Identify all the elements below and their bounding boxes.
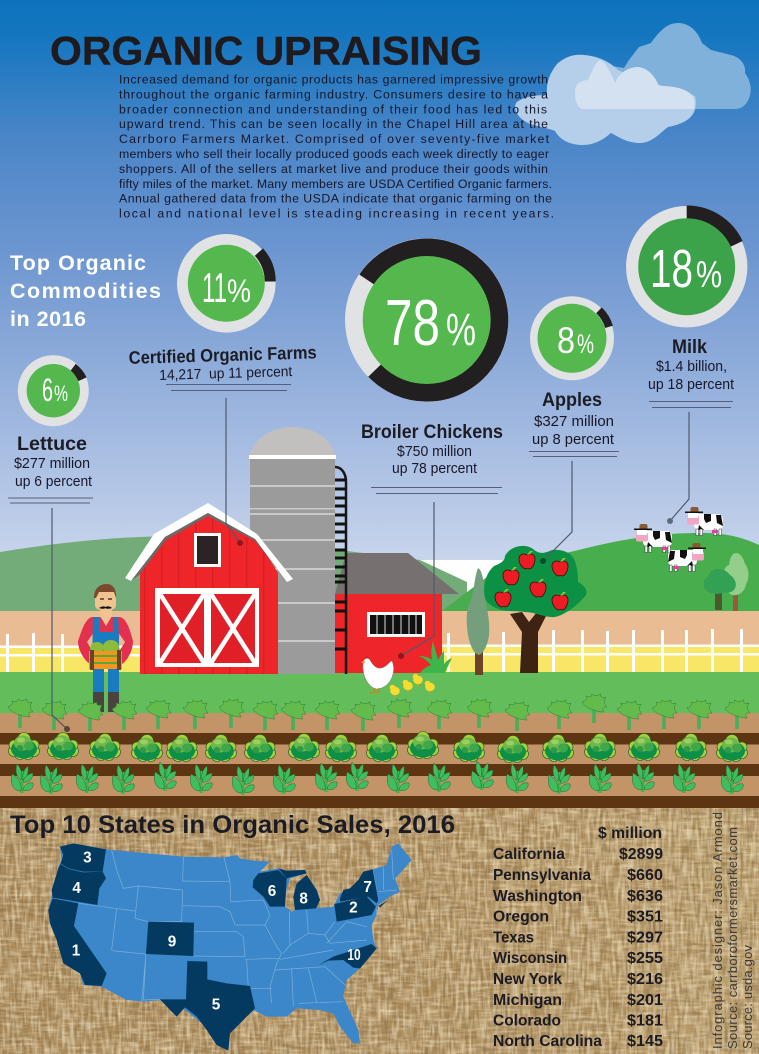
pointer: apples	[540, 461, 572, 564]
silo dome	[250, 427, 335, 455]
front cloud	[515, 55, 696, 145]
sales table: Oregon	[493, 908, 549, 926]
label: lettuce: Lettuce	[17, 433, 87, 455]
crop row: seedlings	[11, 761, 743, 795]
burlap background	[0, 808, 759, 1054]
California	[48, 898, 107, 986]
donut: certified organic farms 11%: 11	[202, 264, 227, 311]
sales table: $351	[627, 908, 663, 926]
sales table: Michigan	[493, 992, 562, 1009]
crop row: lettuce	[8, 732, 748, 762]
shirt and arms	[78, 617, 133, 664]
intro paragraph: Carrboro Farmers Market. Comprised of over seventy-five market	[119, 132, 550, 146]
sales table: $216	[627, 971, 663, 988]
credits: Source: usda.gov	[740, 944, 755, 1049]
map rank numbers: 2	[349, 900, 358, 917]
canopy	[484, 546, 587, 617]
moustache	[99, 606, 112, 609]
cow 3	[668, 543, 706, 572]
commodities heading: Commodities	[10, 279, 161, 303]
sales table: Texas	[493, 930, 534, 946]
label: lettuce: up 6 percent	[15, 474, 92, 490]
donut: lettuce 6%: 6	[42, 372, 53, 408]
legs	[93, 665, 119, 692]
label: lettuce: $277 million	[14, 456, 90, 472]
donut: broiler chickens 78%: %	[446, 304, 476, 355]
cypress tree	[467, 568, 489, 675]
silo	[249, 427, 336, 674]
peach field	[0, 611, 759, 673]
intro paragraph: broader connection and understanding of their food has led to this	[119, 102, 547, 116]
commodities heading: in 2016	[10, 307, 86, 331]
map rank numbers: 4	[72, 880, 81, 897]
map rank numbers: 9	[168, 933, 176, 950]
donut: milk 18%: %	[696, 254, 722, 296]
label: broiler chickens: up 78 percent	[392, 461, 477, 477]
table header: $ million	[598, 825, 662, 842]
label: broiler chickens: Broiler Chickens	[361, 422, 503, 443]
credits: Source: carrboroformersmarket.com	[725, 827, 740, 1049]
cloud overlap	[575, 60, 695, 109]
barn door	[155, 588, 259, 667]
sales table: North Carolina	[493, 1033, 602, 1050]
barn roof	[125, 503, 293, 582]
title: ORGANIC UPRAISING	[50, 30, 482, 74]
intro paragraph: upward trend. This can be seen locally in the Chapel Hill area at the	[119, 117, 548, 131]
label: milk: $1.4 billion,	[656, 359, 727, 375]
base map	[48, 843, 412, 1050]
sales table: New York	[493, 971, 562, 988]
intro paragraph: Increased demand for organic products has garnered impressive growth	[119, 72, 548, 86]
small trees	[704, 553, 748, 611]
boots	[93, 692, 119, 712]
crop row: sprouts	[8, 694, 750, 731]
sales table: $201	[627, 992, 663, 1009]
right hill	[442, 533, 759, 611]
sales table	[493, 825, 663, 1050]
apples	[495, 551, 568, 610]
map rank numbers: 10	[347, 947, 361, 964]
donut: milk 18%	[626, 206, 747, 327]
label: certified organic farms	[128, 342, 317, 385]
grass	[0, 672, 759, 713]
intro paragraph	[119, 72, 554, 221]
grass tuft	[418, 641, 452, 673]
donut: broiler chickens 78%: 78	[385, 286, 440, 359]
dark tree	[704, 569, 736, 610]
light tree	[724, 553, 748, 611]
donut: certified organic farms 11%	[177, 234, 276, 333]
label: milk: Milk	[672, 337, 707, 358]
label: certified organic farms: 14,217 up 11 percent	[159, 364, 292, 384]
Texas	[160, 961, 255, 1051]
sales table: Wisconsin	[493, 950, 567, 967]
sales table: $145	[627, 1033, 663, 1050]
state borders	[78, 850, 397, 1007]
sky background	[0, 0, 759, 560]
donut: certified organic farms 11%: %	[227, 273, 251, 309]
sales table: Colorado	[493, 1012, 561, 1030]
map rank numbers: 6	[268, 883, 276, 900]
label: milk	[648, 337, 734, 393]
intro paragraph: fifty miles of the market. Many members are USDA Certified Organic farmers.	[119, 177, 552, 191]
chicken	[361, 656, 394, 693]
intro paragraph: local and national level is steading increasing in recent years.	[119, 207, 554, 221]
hair	[94, 584, 116, 598]
small barn roof	[335, 553, 459, 594]
donut: lettuce 6%	[18, 355, 89, 426]
sales table: Washington	[493, 888, 582, 905]
label: apples: up 8 percent	[532, 432, 614, 448]
sales table: $255	[627, 950, 663, 967]
intro paragraph: shoppers. All of the sellers at market live and produce their goods within	[119, 162, 548, 176]
label: milk: up 18 percent	[648, 377, 734, 393]
overalls	[92, 617, 120, 668]
sales table: $660	[627, 867, 663, 884]
map rank numbers: 7	[363, 879, 372, 896]
barn loft window	[194, 533, 221, 567]
yellow field	[0, 647, 759, 673]
label: broiler chickens	[361, 422, 503, 477]
head	[95, 590, 116, 610]
small barn window	[367, 612, 425, 637]
US map	[48, 843, 412, 1051]
pointer: broiler chickens	[398, 502, 434, 659]
sales table: California	[493, 846, 565, 863]
Michigan	[278, 868, 320, 910]
red barn	[125, 503, 293, 674]
label: apples: Apples	[542, 389, 602, 411]
pointer: certified organic farms	[226, 398, 243, 546]
apple tree	[484, 546, 587, 673]
sales table: $2899	[619, 846, 663, 863]
small red barn	[335, 553, 459, 673]
map rank numbers: 3	[83, 850, 92, 867]
silo ladder	[335, 467, 346, 674]
neck	[100, 610, 112, 626]
cow group	[634, 507, 723, 572]
Washington	[60, 843, 106, 872]
donut: lettuce 6%: %	[54, 381, 68, 406]
commodities heading: Top Organic	[10, 251, 146, 275]
credits: Infographic designer: Jason Armond	[710, 812, 725, 1049]
label: apples: $327 million	[534, 414, 614, 430]
intro paragraph: throughout the organic farming industry. Consumers desire to have a	[119, 87, 548, 101]
crate of lettuce	[89, 640, 122, 670]
donut: broiler chickens 78%	[345, 238, 508, 402]
sales table: $636	[627, 888, 663, 905]
commodities heading	[10, 251, 161, 331]
pointer: milk	[667, 412, 689, 524]
sales table: $297	[627, 930, 663, 946]
white fence	[0, 629, 759, 672]
map rank numbers: 8	[299, 891, 308, 908]
Colorado	[146, 922, 194, 956]
Pennsylvania	[334, 897, 376, 922]
clouds	[515, 23, 751, 145]
sales table: Pennsylvania	[493, 867, 591, 884]
Wisconsin	[253, 870, 287, 907]
dark states	[48, 843, 388, 1051]
intro paragraph: Annual gathered data from the USDA indicate that organic farming on the	[119, 192, 552, 206]
North Carolina	[318, 944, 377, 968]
pointer: lettuce	[52, 508, 70, 732]
map rank numbers	[72, 850, 372, 1014]
label: broiler chickens: $750 million	[397, 444, 472, 460]
New York	[340, 869, 388, 907]
label: certified organic farms: Certified Organic Farms	[128, 342, 317, 368]
left hill	[0, 536, 467, 611]
soil rows	[0, 713, 759, 808]
donut: apples 8%	[530, 296, 614, 380]
sales table: $181	[627, 1012, 663, 1030]
credits	[710, 812, 755, 1049]
label: lettuce	[14, 433, 92, 490]
map rank numbers: 1	[72, 942, 81, 959]
label: apples	[532, 389, 614, 448]
back cloud	[575, 23, 751, 109]
eyes	[100, 598, 112, 600]
donut: milk 18%: 18	[650, 239, 693, 299]
cow 2	[685, 507, 723, 536]
states heading: Top 10 States in Organic Sales, 2016	[10, 811, 455, 839]
donut: apples 8%: %	[577, 329, 594, 359]
farmer	[78, 584, 133, 712]
cow 1	[634, 524, 672, 552]
donut: apples 8%: 8	[557, 320, 575, 361]
trunk	[510, 612, 546, 673]
map rank numbers: 5	[212, 997, 221, 1014]
Oregon	[52, 864, 106, 905]
chicks	[388, 674, 435, 698]
intro paragraph: members who sell their locally produced goods each week directly to eager	[119, 147, 549, 161]
